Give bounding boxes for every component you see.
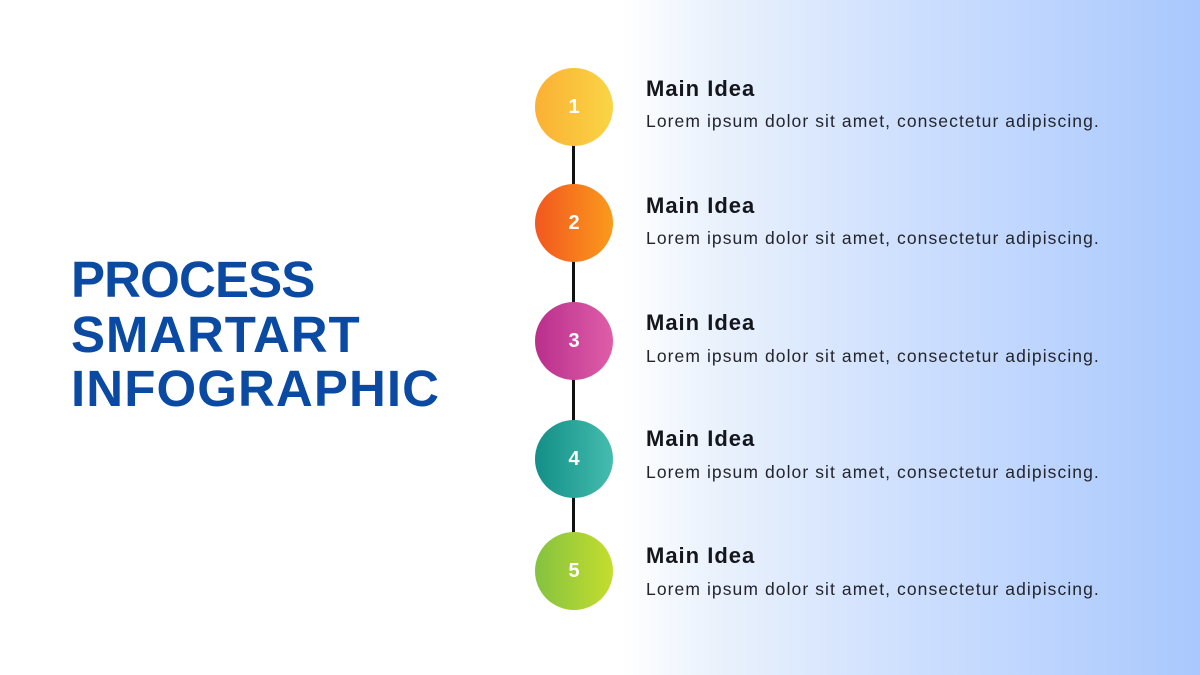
background gradient panel: [622, 0, 1200, 675]
step text 3: [646, 310, 1100, 366]
step text 4: [646, 426, 1100, 482]
title: SMARTART: [71, 306, 361, 362]
step text 1: [646, 76, 1100, 131]
step text 3: Lorem ipsum dolor sit amet, consectetur adipiscing.: [646, 346, 1100, 366]
step circle 1: [535, 68, 613, 146]
step circle 2: 2: [568, 212, 580, 234]
step text 5: Lorem ipsum dolor sit amet, consectetur adipiscing.: [646, 579, 1100, 599]
step circle 4: [535, 420, 613, 498]
step circle 2: [535, 184, 613, 262]
step text 4: Main Idea: [646, 426, 755, 451]
step text 1: Main Idea: [646, 76, 755, 101]
step circle 3: [535, 302, 613, 380]
step circle 5: [535, 532, 613, 610]
title: PROCESS: [71, 251, 314, 308]
title: [71, 251, 440, 417]
step text 5: Main Idea: [646, 543, 755, 568]
step circle 3: 3: [568, 330, 580, 352]
step text 4: Lorem ipsum dolor sit amet, consectetur adipiscing.: [646, 462, 1100, 482]
step text 2: Main Idea: [646, 193, 755, 218]
step text 3: Main Idea: [646, 310, 755, 335]
title: INFOGRAPHIC: [71, 360, 440, 417]
timeline connector line: [572, 107, 575, 571]
step text 2: [646, 193, 1100, 248]
step circle 1: 1: [568, 96, 580, 118]
step circle 5: 5: [568, 560, 580, 582]
step circle 4: 4: [568, 448, 580, 470]
step text 2: Lorem ipsum dolor sit amet, consectetur adipiscing.: [646, 228, 1100, 248]
step text 1: Lorem ipsum dolor sit amet, consectetur adipiscing.: [646, 111, 1100, 131]
step text 5: [646, 543, 1100, 599]
